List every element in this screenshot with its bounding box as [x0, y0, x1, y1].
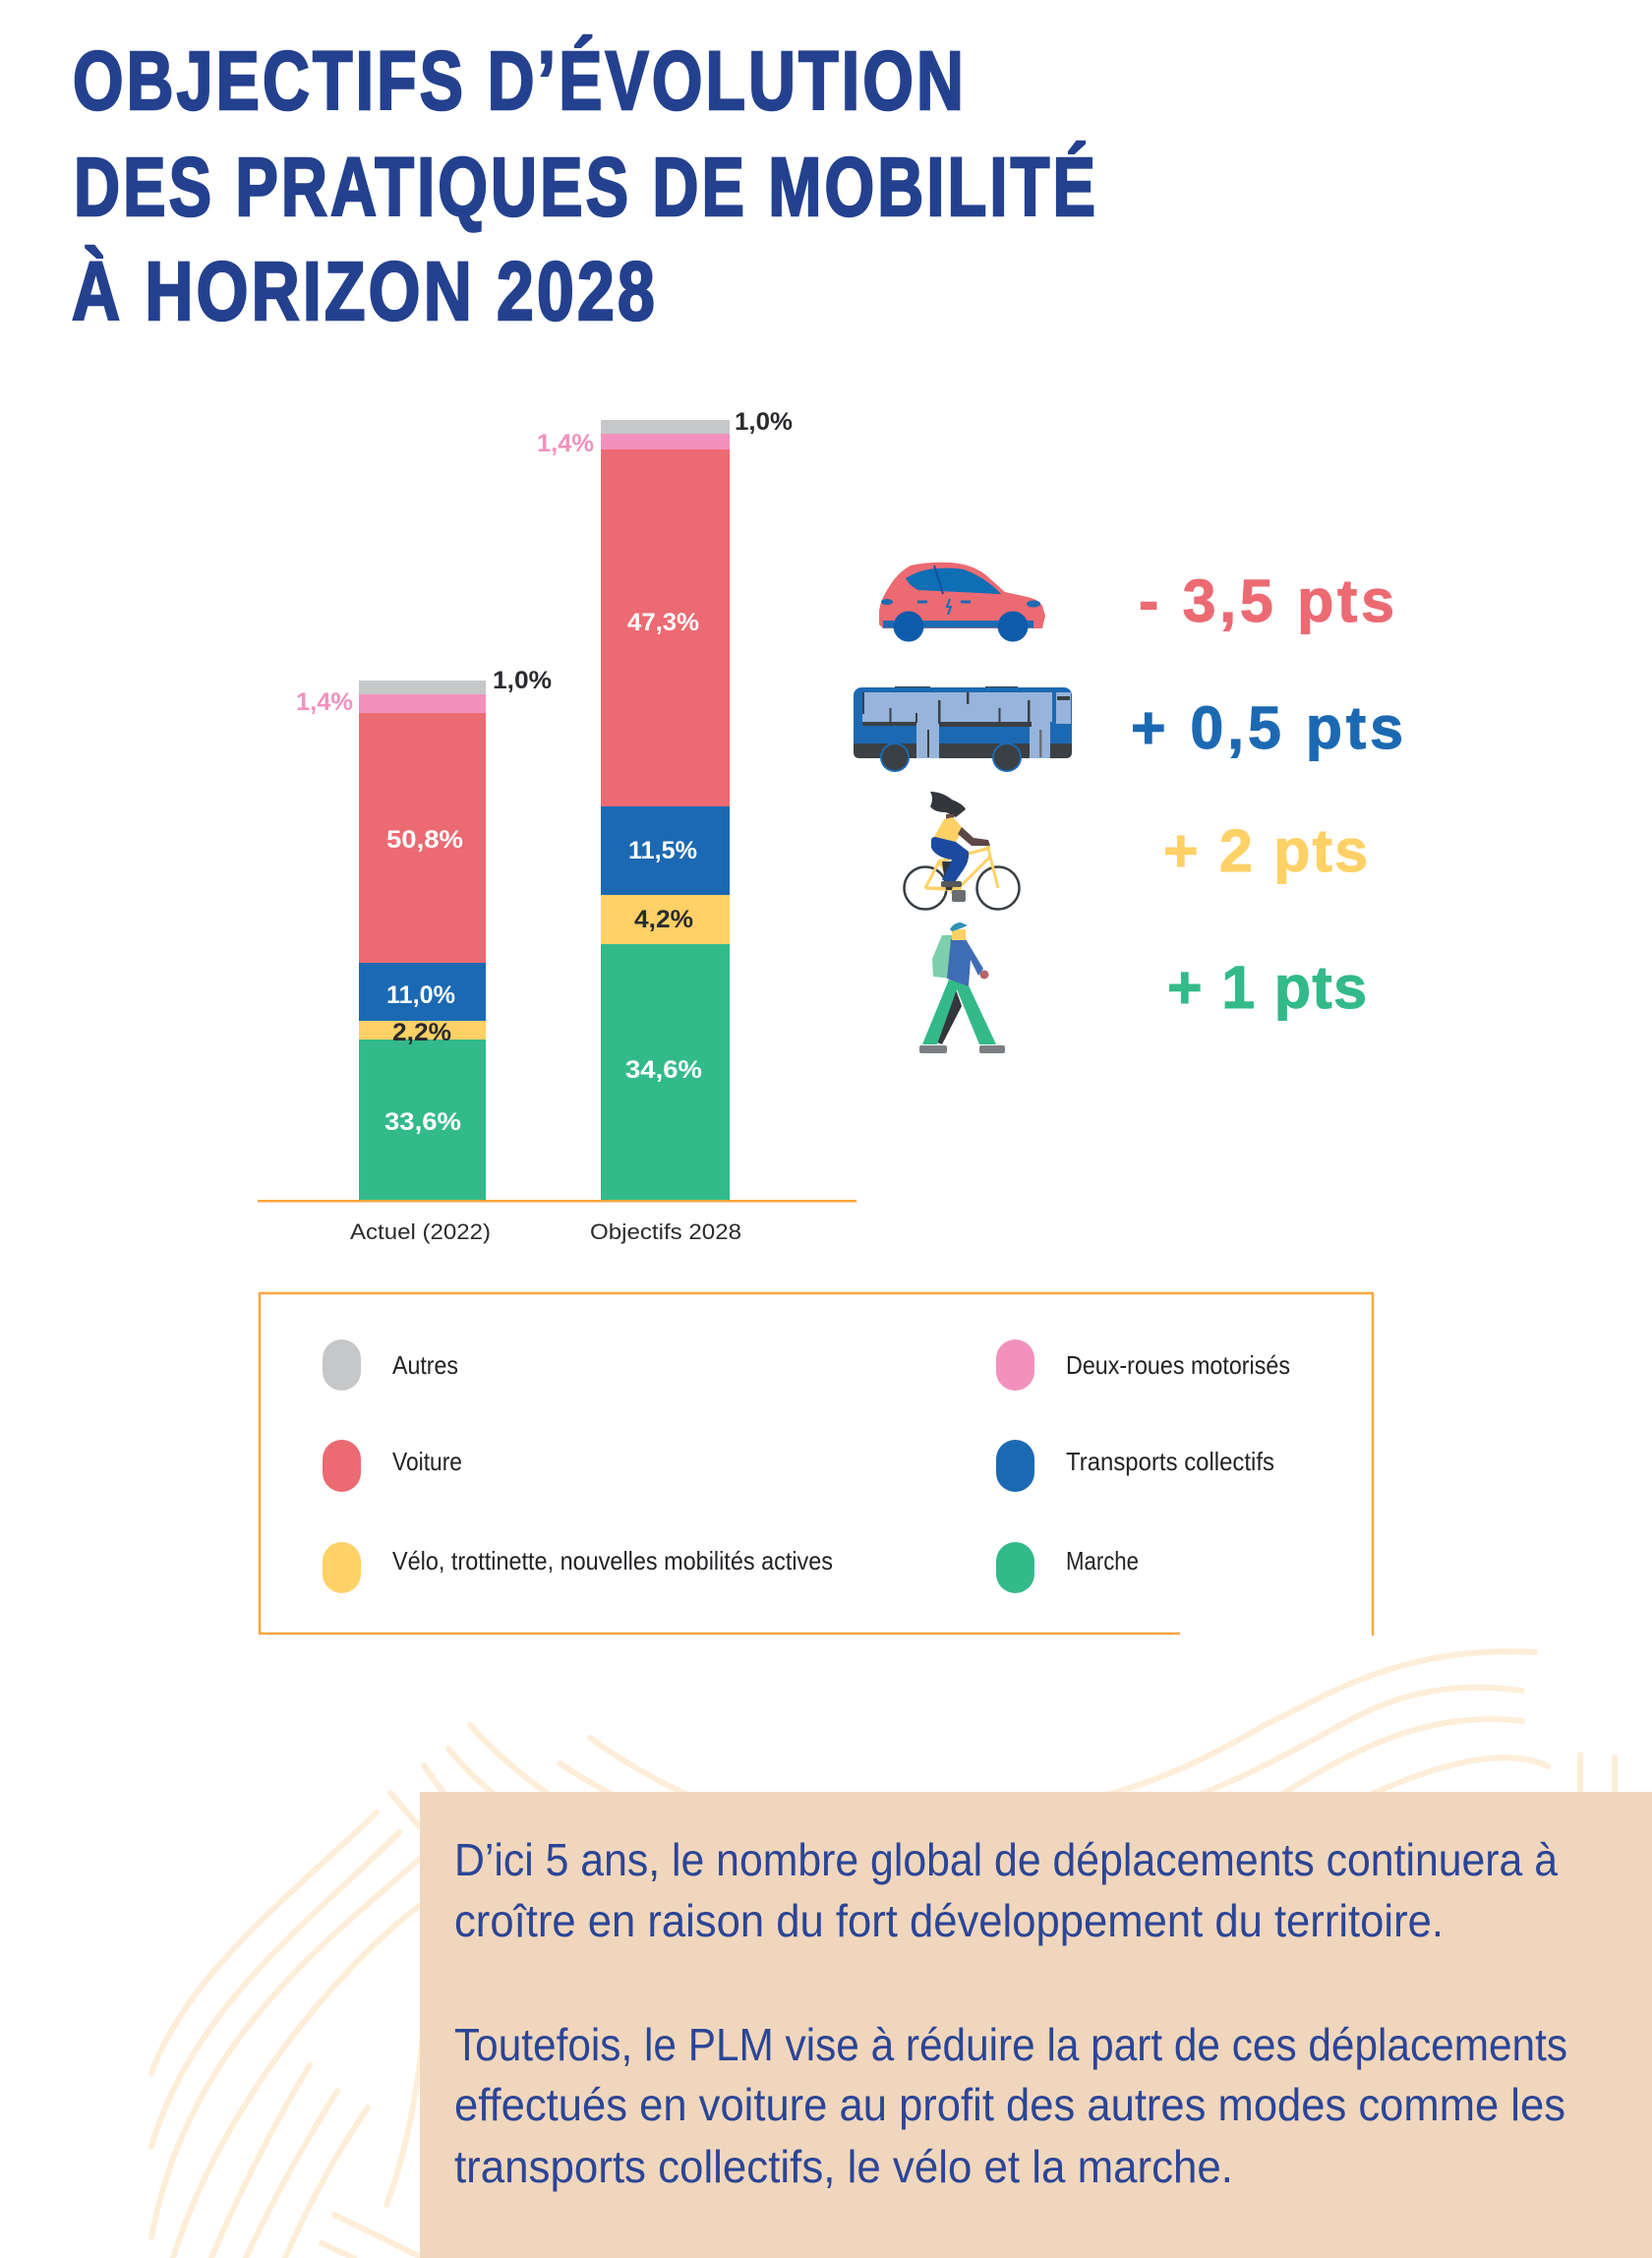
legend frame [260, 1293, 1373, 1635]
paragraph 2: Toutefois, le PLM vise à réduire la part de ces déplacements [454, 2019, 1567, 2070]
bar: Objectifs 2028: 1,4% [537, 430, 594, 457]
points: bus: + 0,5 pts [1131, 694, 1403, 761]
icon: bus [854, 686, 1072, 772]
title: À HORIZON 2028 [72, 245, 658, 337]
paragraph 2 [454, 2019, 1567, 2192]
legend item: Marche: Marche [1066, 1546, 1139, 1575]
legend item: Deux-roues motorisés [996, 1339, 1290, 1391]
axis labels [350, 1219, 741, 1244]
bar: Actuel (2022) [296, 667, 552, 1200]
title: OBJECTIFS D’ÉVOLUTION [73, 34, 967, 127]
paragraph 2: effectués en voiture au profit des autres modes comme les [454, 2079, 1565, 2130]
legend item: Marche [996, 1542, 1139, 1593]
paragraph 1 [454, 1834, 1558, 1946]
legend item: Transports collectifs [996, 1440, 1274, 1492]
legend item: Autres [323, 1339, 458, 1391]
bar: Actuel (2022): 1,4% [296, 688, 353, 716]
axis labels: Actuel (2022) [350, 1219, 491, 1244]
legend item: Voiture [323, 1440, 462, 1492]
title [72, 34, 1098, 337]
points: bike: + 2 pts [1163, 817, 1368, 884]
stacked bar chart [258, 408, 856, 1244]
icon: car [879, 563, 1045, 641]
bar: Objectifs 2028: 47,3% [627, 609, 699, 636]
background swirl lines [151, 1651, 1615, 2258]
legend item: Deux-roues motorisés: Deux-roues motorisés [1066, 1350, 1290, 1380]
text panel [420, 1792, 1652, 2258]
bar: Objectifs 2028: 4,2% [634, 906, 693, 933]
legend item: Transports collectifs: Transports collectifs [1066, 1447, 1274, 1476]
bar: Objectifs 2028: 1,0% [735, 408, 793, 436]
legend item: Vélo [323, 1542, 833, 1593]
axis line [258, 1200, 856, 1202]
points: car: - 3,5 pts [1139, 567, 1394, 634]
legend item: Voiture: Voiture [392, 1447, 462, 1476]
bar: Objectifs 2028: 34,6% [625, 1056, 702, 1084]
bar: Actuel (2022): 2,2% [392, 1019, 451, 1046]
icon: walker [919, 922, 1005, 1053]
bar: Actuel (2022): 50,8% [386, 826, 463, 854]
paragraph 1: D’ici 5 ans, le nombre global de déplacements continuera à [454, 1834, 1558, 1885]
icon: cyclist [905, 792, 1019, 909]
paragraph 1: croître en raison du fort développement du territoire. [454, 1895, 1444, 1946]
legend panel [260, 1293, 1373, 1635]
paragraph 2: transports collectifs, le vélo et la marche. [454, 2141, 1233, 2192]
legend item: Autres: Autres [392, 1350, 458, 1380]
axis labels: Objectifs 2028 [590, 1219, 741, 1244]
points: walk: + 1 pts [1167, 954, 1367, 1021]
title: DES PRATIQUES DE MOBILITÉ [74, 141, 1098, 233]
legend item: Vélo: Vélo, trottinette, nouvelles mobilités actives [392, 1546, 833, 1575]
bar: Objectifs 2028 [537, 408, 793, 1200]
bar: Objectifs 2028: 11,5% [628, 837, 697, 864]
bar: Actuel (2022): 11,0% [386, 981, 455, 1009]
bar: Actuel (2022): 1,0% [493, 667, 552, 694]
bar: Actuel (2022): 33,6% [384, 1108, 461, 1136]
